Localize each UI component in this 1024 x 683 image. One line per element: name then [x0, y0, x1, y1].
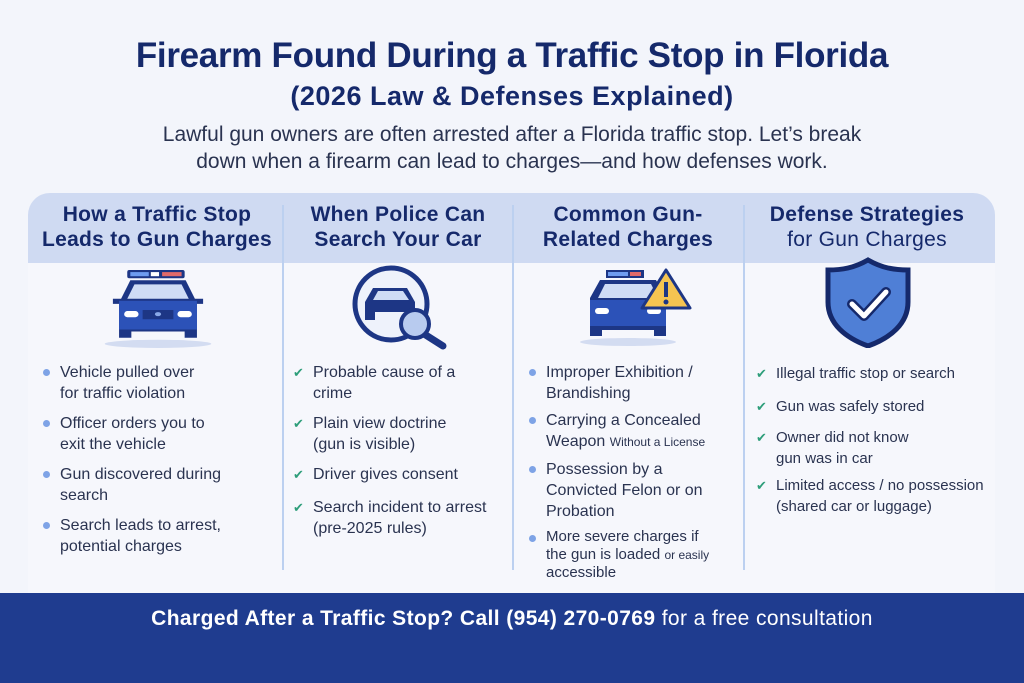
title: Firearm Found During a Traffic Stop in Florida [136, 36, 888, 75]
panel: how a traffic stop leads [42, 203, 272, 251]
panel: how a traffic stop leads: Leads to Gun Charges [42, 228, 272, 251]
panel: when police can search: When Police Can [311, 203, 485, 226]
list: defenses: Illegal traffic stop or search [776, 365, 955, 382]
list: defenses: Owner did not know [776, 429, 909, 446]
list: charges: Improper Exhibition / [546, 364, 693, 381]
list: charges: Convicted Felon or on [546, 482, 703, 499]
list: traffic stop: Gun discovered during [60, 466, 221, 483]
list: traffic stop: search [60, 487, 108, 504]
list: charges: More severe charges if [546, 528, 699, 545]
list: traffic stop: Search leads to arrest, [60, 517, 221, 534]
icon: car with warning [580, 268, 692, 346]
panel: when police can search: Search Your Car [314, 228, 482, 251]
intro text: down when a firearm can lead to charges—and how defenses work. [196, 150, 828, 173]
panel: defense strategies [770, 203, 964, 251]
list: charges: Probation [546, 503, 614, 520]
icon: magnifier car [352, 266, 446, 350]
list: charges: Carrying a Concealed [546, 412, 701, 429]
list: traffic stop [43, 364, 221, 555]
list: charges: the gun is loaded or easily [546, 546, 709, 563]
panel: when police can search [310, 203, 485, 251]
panel: how a traffic stop leads: How a Traffic Stop [63, 203, 251, 226]
panel: defense strategies: Defense Strategies [770, 203, 964, 226]
list: charges: Brandishing [546, 385, 630, 402]
list: search [294, 364, 486, 537]
list: charges [529, 364, 710, 581]
list: search: Search incident to arrest [313, 499, 486, 516]
banner: call to action: Charged After a Traffic Stop? Call (954) 270-0769 for a free consultation [151, 607, 873, 630]
list: search: crime [313, 385, 352, 402]
banner: call to action [0, 593, 1024, 683]
list: defenses: Limited access / no possession [776, 477, 984, 494]
panel: defense strategies: for Gun Charges [787, 228, 947, 251]
intro text [163, 123, 862, 173]
list: search: Probable cause of a [313, 364, 455, 381]
list: traffic stop: Officer orders you to [60, 415, 205, 432]
list: charges: Weapon Without a License [546, 433, 705, 450]
header band [28, 193, 995, 263]
list: defenses: Gun was safely stored [776, 398, 924, 415]
panel: common charges [543, 203, 713, 251]
list: search: (pre-2025 rules) [313, 520, 427, 537]
panel: common charges: Common Gun- [553, 203, 703, 226]
list: traffic stop: Vehicle pulled over [60, 364, 194, 381]
list: traffic stop: exit the vehicle [60, 436, 166, 453]
icon: police car [104, 270, 212, 348]
list: search: Driver gives consent [313, 466, 458, 483]
list: defenses: gun was in car [776, 450, 873, 467]
list: search: (gun is visible) [313, 436, 415, 453]
icon: shield [826, 257, 910, 348]
list: defenses: (shared car or luggage) [776, 498, 932, 515]
list: search: Plain view doctrine [313, 415, 446, 432]
list: defenses [758, 365, 984, 515]
subtitle: (2026 Law & Defenses Explained) [290, 81, 734, 111]
list: traffic stop: for traffic violation [60, 385, 185, 402]
intro text: Lawful gun owners are often arrested after a Florida traffic stop. Let’s break [163, 123, 861, 146]
panel: common charges: Related Charges [543, 228, 713, 251]
list: traffic stop: potential charges [60, 538, 182, 555]
list: charges: accessible [546, 564, 616, 581]
list: charges: Possession by a [546, 461, 663, 478]
